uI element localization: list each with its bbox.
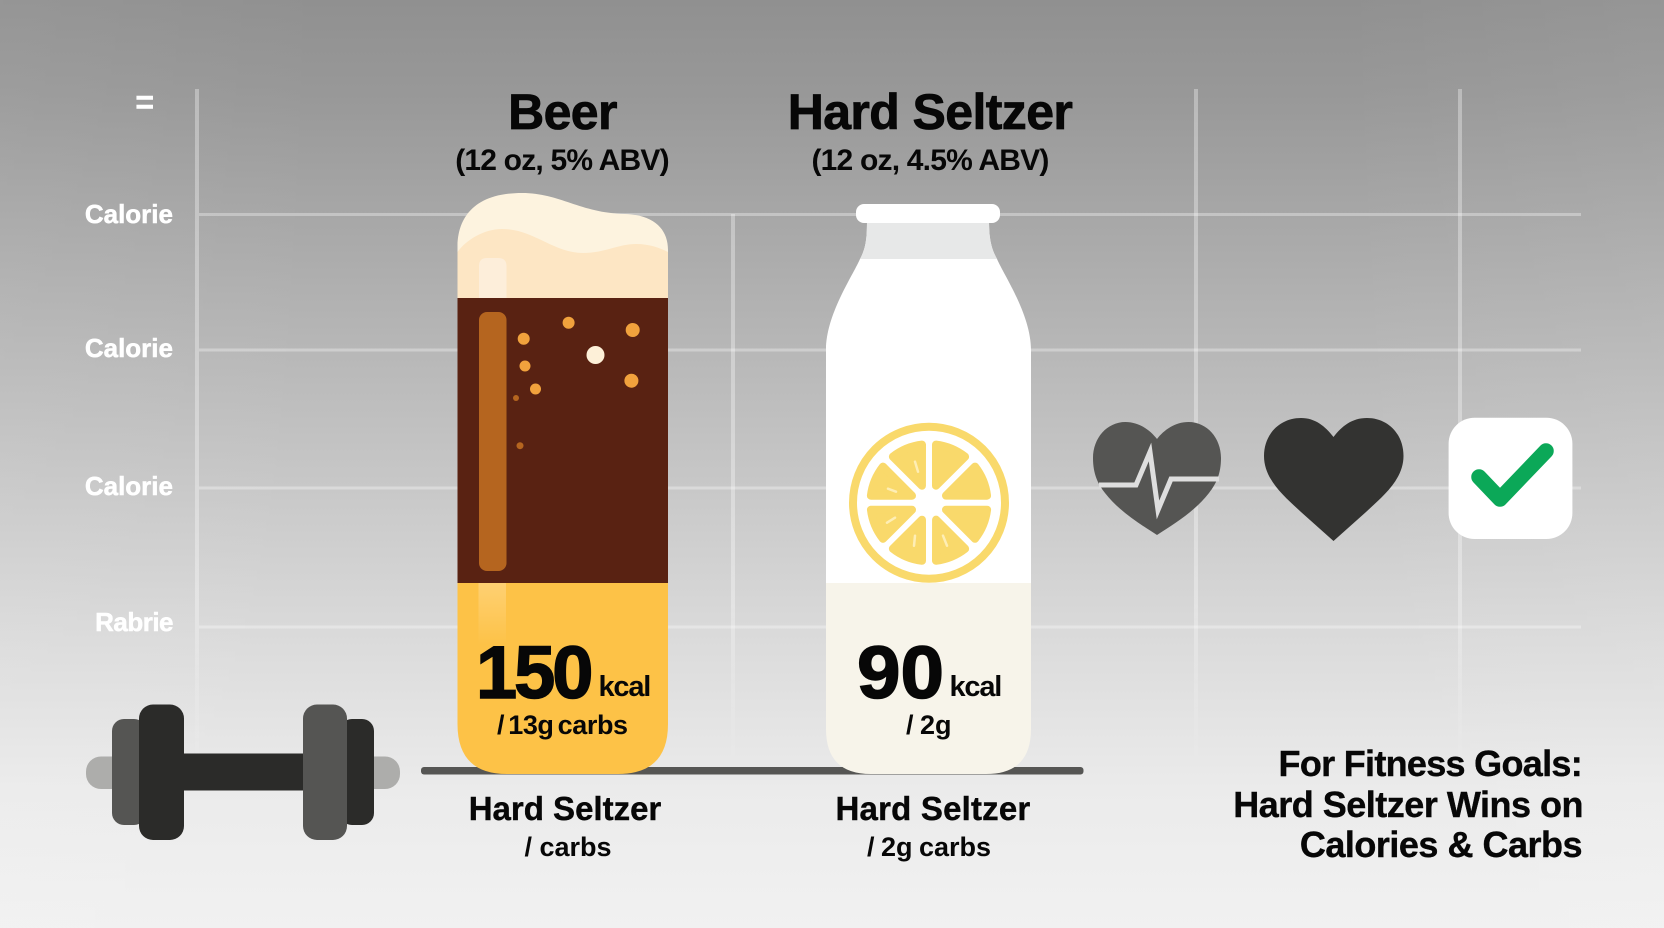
caption: right column: Hard Seltzer bbox=[836, 790, 1030, 827]
seltzer value bbox=[857, 631, 1001, 740]
beer value: / 13g carbs bbox=[497, 710, 628, 740]
foam bbox=[458, 193, 668, 253]
bottle cap bbox=[856, 204, 1000, 223]
conclusion text: Hard Seltzer Wins on bbox=[1233, 784, 1583, 825]
glass highlight bbox=[479, 312, 506, 571]
heading: beer: Beer bbox=[508, 84, 617, 140]
conclusion text: Calories & Carbs bbox=[1300, 824, 1582, 865]
caption: right column: / 2g carbs bbox=[867, 832, 991, 862]
seltzer value: 90 bbox=[857, 631, 944, 714]
bottle neck shade bbox=[860, 223, 996, 259]
axis label 4: Rabrie bbox=[95, 607, 173, 637]
caption: left column: Hard Seltzer bbox=[469, 790, 661, 827]
beer value: 150 bbox=[476, 631, 591, 714]
icon: dumbbell bbox=[86, 704, 400, 840]
bottle base level bbox=[820, 583, 1040, 778]
heading: hard seltzer bbox=[788, 84, 1072, 177]
caption: left column: / carbs bbox=[524, 832, 612, 862]
bottle body bbox=[820, 215, 1040, 583]
axis label 2: Calorie bbox=[85, 333, 173, 363]
heading: beer bbox=[455, 84, 669, 177]
conclusion text bbox=[1233, 743, 1583, 865]
conclusion text: For Fitness Goals: bbox=[1279, 743, 1582, 784]
icon: green check tile bbox=[1449, 418, 1572, 539]
beer base level bbox=[450, 583, 675, 778]
base highlight bbox=[478, 583, 506, 645]
beer body bbox=[450, 298, 675, 583]
heading: hard seltzer: Hard Seltzer bbox=[788, 84, 1072, 140]
icon: heart with pulse bbox=[1093, 422, 1221, 535]
seltzer bottle bbox=[820, 204, 1040, 778]
inner foam bbox=[458, 229, 668, 298]
heading: beer: (12 oz, 5% ABV) bbox=[455, 144, 669, 177]
bubbles bbox=[513, 317, 640, 449]
beer glass bbox=[450, 185, 675, 778]
icon: solid heart bbox=[1264, 418, 1404, 541]
beer value: kcal bbox=[598, 671, 650, 703]
axis labels bbox=[85, 84, 173, 637]
heading: hard seltzer: (12 oz, 4.5% ABV) bbox=[811, 144, 1049, 177]
axis label 3: Calorie bbox=[85, 471, 173, 501]
axis label 1: Calorie bbox=[85, 199, 173, 229]
seltzer value: kcal bbox=[950, 671, 1001, 703]
seltzer value: / 2g bbox=[906, 710, 952, 740]
lemon slice bbox=[853, 427, 1005, 579]
axis header symbol: = bbox=[135, 84, 154, 120]
caption: left column bbox=[469, 790, 661, 862]
chart grid bbox=[195, 89, 1581, 770]
baseline shelf bbox=[421, 767, 1084, 774]
caption: right column bbox=[836, 790, 1030, 862]
beer value bbox=[476, 631, 650, 740]
foam highlight bbox=[479, 258, 506, 298]
